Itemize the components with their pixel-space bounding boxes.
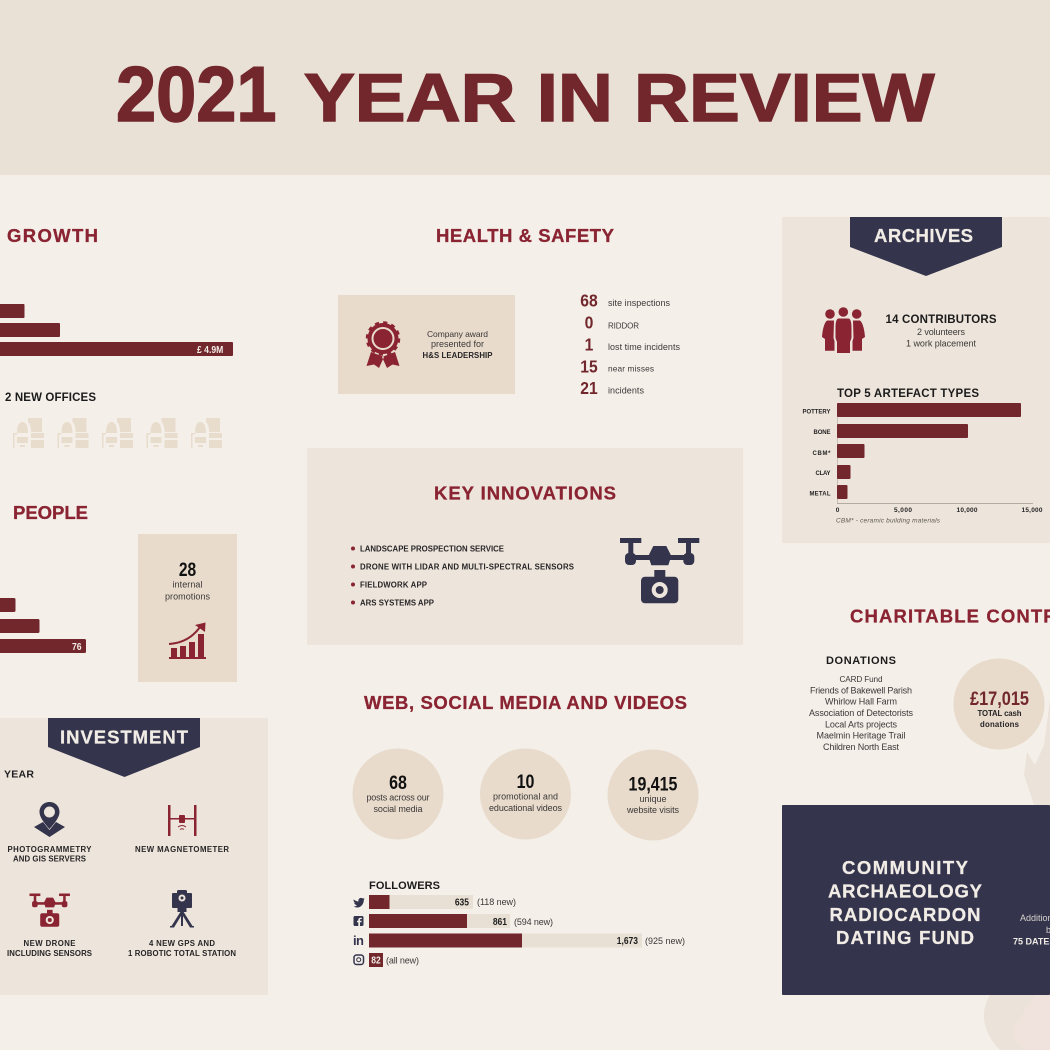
people bar chart: 76 <box>72 641 82 653</box>
followers chart: (all new) <box>386 956 419 966</box>
panel: health and safety: HEALTH & SAFETY <box>436 225 615 246</box>
safety statistics: near misses <box>608 364 654 374</box>
panel: radiocarbon dating fund: RADIOCARDON <box>830 904 980 925</box>
label: new drone: NEW DRONE <box>24 939 76 948</box>
donations list: CARD Fund <box>840 675 883 684</box>
archives banner: ARCHIVES <box>874 225 973 246</box>
icon: map pin <box>34 802 65 837</box>
panel: investment <box>0 718 268 995</box>
label: new drone: INCLUDING SENSORS <box>7 949 92 958</box>
panel: people: PEOPLE <box>13 502 88 523</box>
panel: web, social media and videos <box>352 692 698 967</box>
card: internal promotions: 28 <box>179 559 196 580</box>
safety statistics: 21 <box>580 378 598 398</box>
stat circle: videos <box>480 748 571 840</box>
card: company award <box>338 295 515 394</box>
partial heading: YEAR <box>4 768 34 780</box>
panel: radiocarbon dating fund <box>782 805 1050 995</box>
donations list: Maelmin Heritage Trail <box>816 730 906 740</box>
panel: people <box>0 502 237 682</box>
label: photogrammetry <box>8 845 92 864</box>
safety statistics: RIDDOR <box>608 321 639 330</box>
stat circle: videos: educational videos <box>489 803 562 813</box>
artefact types bar chart: BONE <box>814 430 830 436</box>
title banner: 2021 <box>116 50 276 138</box>
label: new drone <box>7 939 92 958</box>
stat circle: website visits: unique <box>640 794 666 804</box>
label: gps and total station: 1 ROBOTIC TOTAL STATION <box>128 949 236 958</box>
panel: health and safety <box>338 225 680 398</box>
artefact types bar chart: 5,000 <box>894 507 912 514</box>
card: company award: H&S LEADERSHIP <box>422 351 492 360</box>
panel: growth: GROWTH <box>7 225 98 246</box>
artefact types bar chart: CBM* - ceramic building materials <box>836 518 941 524</box>
icon: award rosette <box>366 322 400 368</box>
safety statistics <box>580 291 680 398</box>
stat circle: total donations: donations <box>980 720 1020 729</box>
innovations list <box>351 544 574 608</box>
safety statistics: incidents <box>608 386 644 396</box>
panel: radiocarbon dating fund: DATING FUND <box>836 927 974 948</box>
investment banner <box>48 718 200 777</box>
card: internal promotions: internal <box>172 580 202 590</box>
followers chart: 82 <box>371 955 381 966</box>
safety statistics: site inspections <box>608 298 670 308</box>
panel: archives <box>782 217 1050 543</box>
label: photogrammetry: PHOTOGRAMMETRY <box>8 845 92 854</box>
artefact types bar chart: 0 <box>836 507 840 514</box>
card: company award: Company award <box>427 329 488 339</box>
followers chart: FOLLOWERS <box>369 880 440 892</box>
followers chart: 635 <box>455 897 469 908</box>
people bar chart <box>0 598 86 653</box>
donations list: Children North East <box>823 742 899 752</box>
contributors text <box>886 314 997 348</box>
contributors text: 2 volunteers <box>917 327 966 337</box>
icon: facebook <box>354 916 364 926</box>
innovations list: LANDSCAPE PROSPECTION SERVICE <box>360 544 504 554</box>
title banner: YEAR IN REVIEW <box>304 61 935 136</box>
innovations list: ARS SYSTEMS APP <box>360 598 434 608</box>
followers chart: 1,673 <box>617 935 638 946</box>
followers chart: (594 new) <box>514 917 553 927</box>
icon: rising bar chart <box>169 622 206 659</box>
artefact types bar chart: 15,000 <box>1022 507 1043 514</box>
panel: key innovations: KEY INNOVATIONS <box>434 482 616 504</box>
donations list: Local Arts projects <box>825 720 898 730</box>
stat circle: total donations: £17,015 <box>970 688 1029 709</box>
stat circle: total donations: TOTAL cash <box>978 709 1022 718</box>
icon: magnetometer <box>168 805 196 836</box>
panel: growth <box>0 225 233 448</box>
panel: key innovations <box>307 448 743 645</box>
safety statistics: lost time incidents <box>608 342 680 352</box>
card: internal promotions <box>138 534 237 682</box>
icon: red drone <box>30 894 70 927</box>
fund details text <box>1013 913 1050 946</box>
stat circle: videos: 10 <box>517 771 534 792</box>
panel: charitable contributions <box>809 606 1050 752</box>
stat circle: website visits: 19,415 <box>629 773 678 795</box>
panel: web, social media and videos: WEB, SOCIAL MEDIA AND VIDEOS <box>364 692 687 713</box>
stat circle: posts <box>352 748 444 840</box>
investment banner: INVESTMENT <box>60 726 189 748</box>
stat circle: total donations <box>954 658 1044 750</box>
label: magnetometer: NEW MAGNETOMETER <box>135 845 229 854</box>
artefact types bar chart: CBM* <box>812 451 831 457</box>
donations list: Whirlow Hall Farm <box>825 696 897 706</box>
stat circle: posts: 68 <box>389 772 407 793</box>
icon: navy drone <box>620 538 699 603</box>
artefact types bar chart: CLAY <box>816 471 830 477</box>
followers chart <box>353 880 685 967</box>
panel: radiocarbon dating fund: ARCHAEOLOGY <box>828 880 983 902</box>
safety statistics: 15 <box>580 357 598 377</box>
stat circle: website visits <box>608 750 698 840</box>
archives banner <box>850 217 1002 276</box>
contributors text: 14 CONTRIBUTORS <box>886 314 997 326</box>
stat circle: website visits: website visits <box>626 805 680 815</box>
label: gps and total station: 4 NEW GPS AND <box>149 939 215 948</box>
stat circle: posts: social media <box>374 804 422 814</box>
icon: twitter <box>354 898 364 908</box>
donations list <box>809 655 914 752</box>
safety statistics: 68 <box>580 291 598 311</box>
icon: instagram <box>354 955 364 964</box>
icon: contributors <box>822 307 865 353</box>
label: gps and total station <box>128 939 236 958</box>
innovations list: DRONE WITH LIDAR AND MULTI-SPECTRAL SENSORS <box>360 562 574 572</box>
followers chart: (925 new) <box>645 936 685 946</box>
contributors text: 1 work placement <box>906 338 976 348</box>
label: photogrammetry: AND GIS SERVERS <box>13 854 86 864</box>
artefact types bar chart: METAL <box>810 492 831 498</box>
icon: linkedin: in <box>353 933 364 948</box>
background decoration: flame shapes <box>984 700 1050 1050</box>
followers chart: (118 new) <box>477 897 516 907</box>
icons: office desks <box>13 418 222 448</box>
artefact types bar chart: POTTERY <box>802 410 830 416</box>
donations list: DONATIONS <box>826 655 896 667</box>
followers chart: 861 <box>493 916 507 927</box>
growth bar chart <box>0 304 233 356</box>
donations list: Association of Detectorists <box>809 708 914 718</box>
safety statistics: 0 <box>585 312 593 333</box>
artefact types bar chart: 10,000 <box>956 507 978 514</box>
card: internal promotions: promotions <box>165 591 210 601</box>
artefact types bar chart: TOP 5 ARTEFACT TYPES <box>837 388 979 400</box>
icon: total station on tripod <box>170 890 194 928</box>
innovations list: FIELDWORK APP <box>360 580 427 590</box>
title banner <box>0 0 1050 175</box>
stat circle: videos: promotional and <box>493 792 558 802</box>
artefact types bar chart <box>802 388 1043 524</box>
donations list: Friends of Bakewell Parish <box>810 686 912 696</box>
panel: radiocarbon dating fund: COMMUNITY <box>842 857 969 878</box>
growth bar chart: £ 4.9M <box>197 344 223 356</box>
stat circle: posts: posts across our <box>366 792 430 802</box>
safety statistics: 1 <box>585 335 593 355</box>
card: company award: presented for <box>431 339 484 349</box>
new offices heading: 2 NEW OFFICES <box>5 392 96 404</box>
